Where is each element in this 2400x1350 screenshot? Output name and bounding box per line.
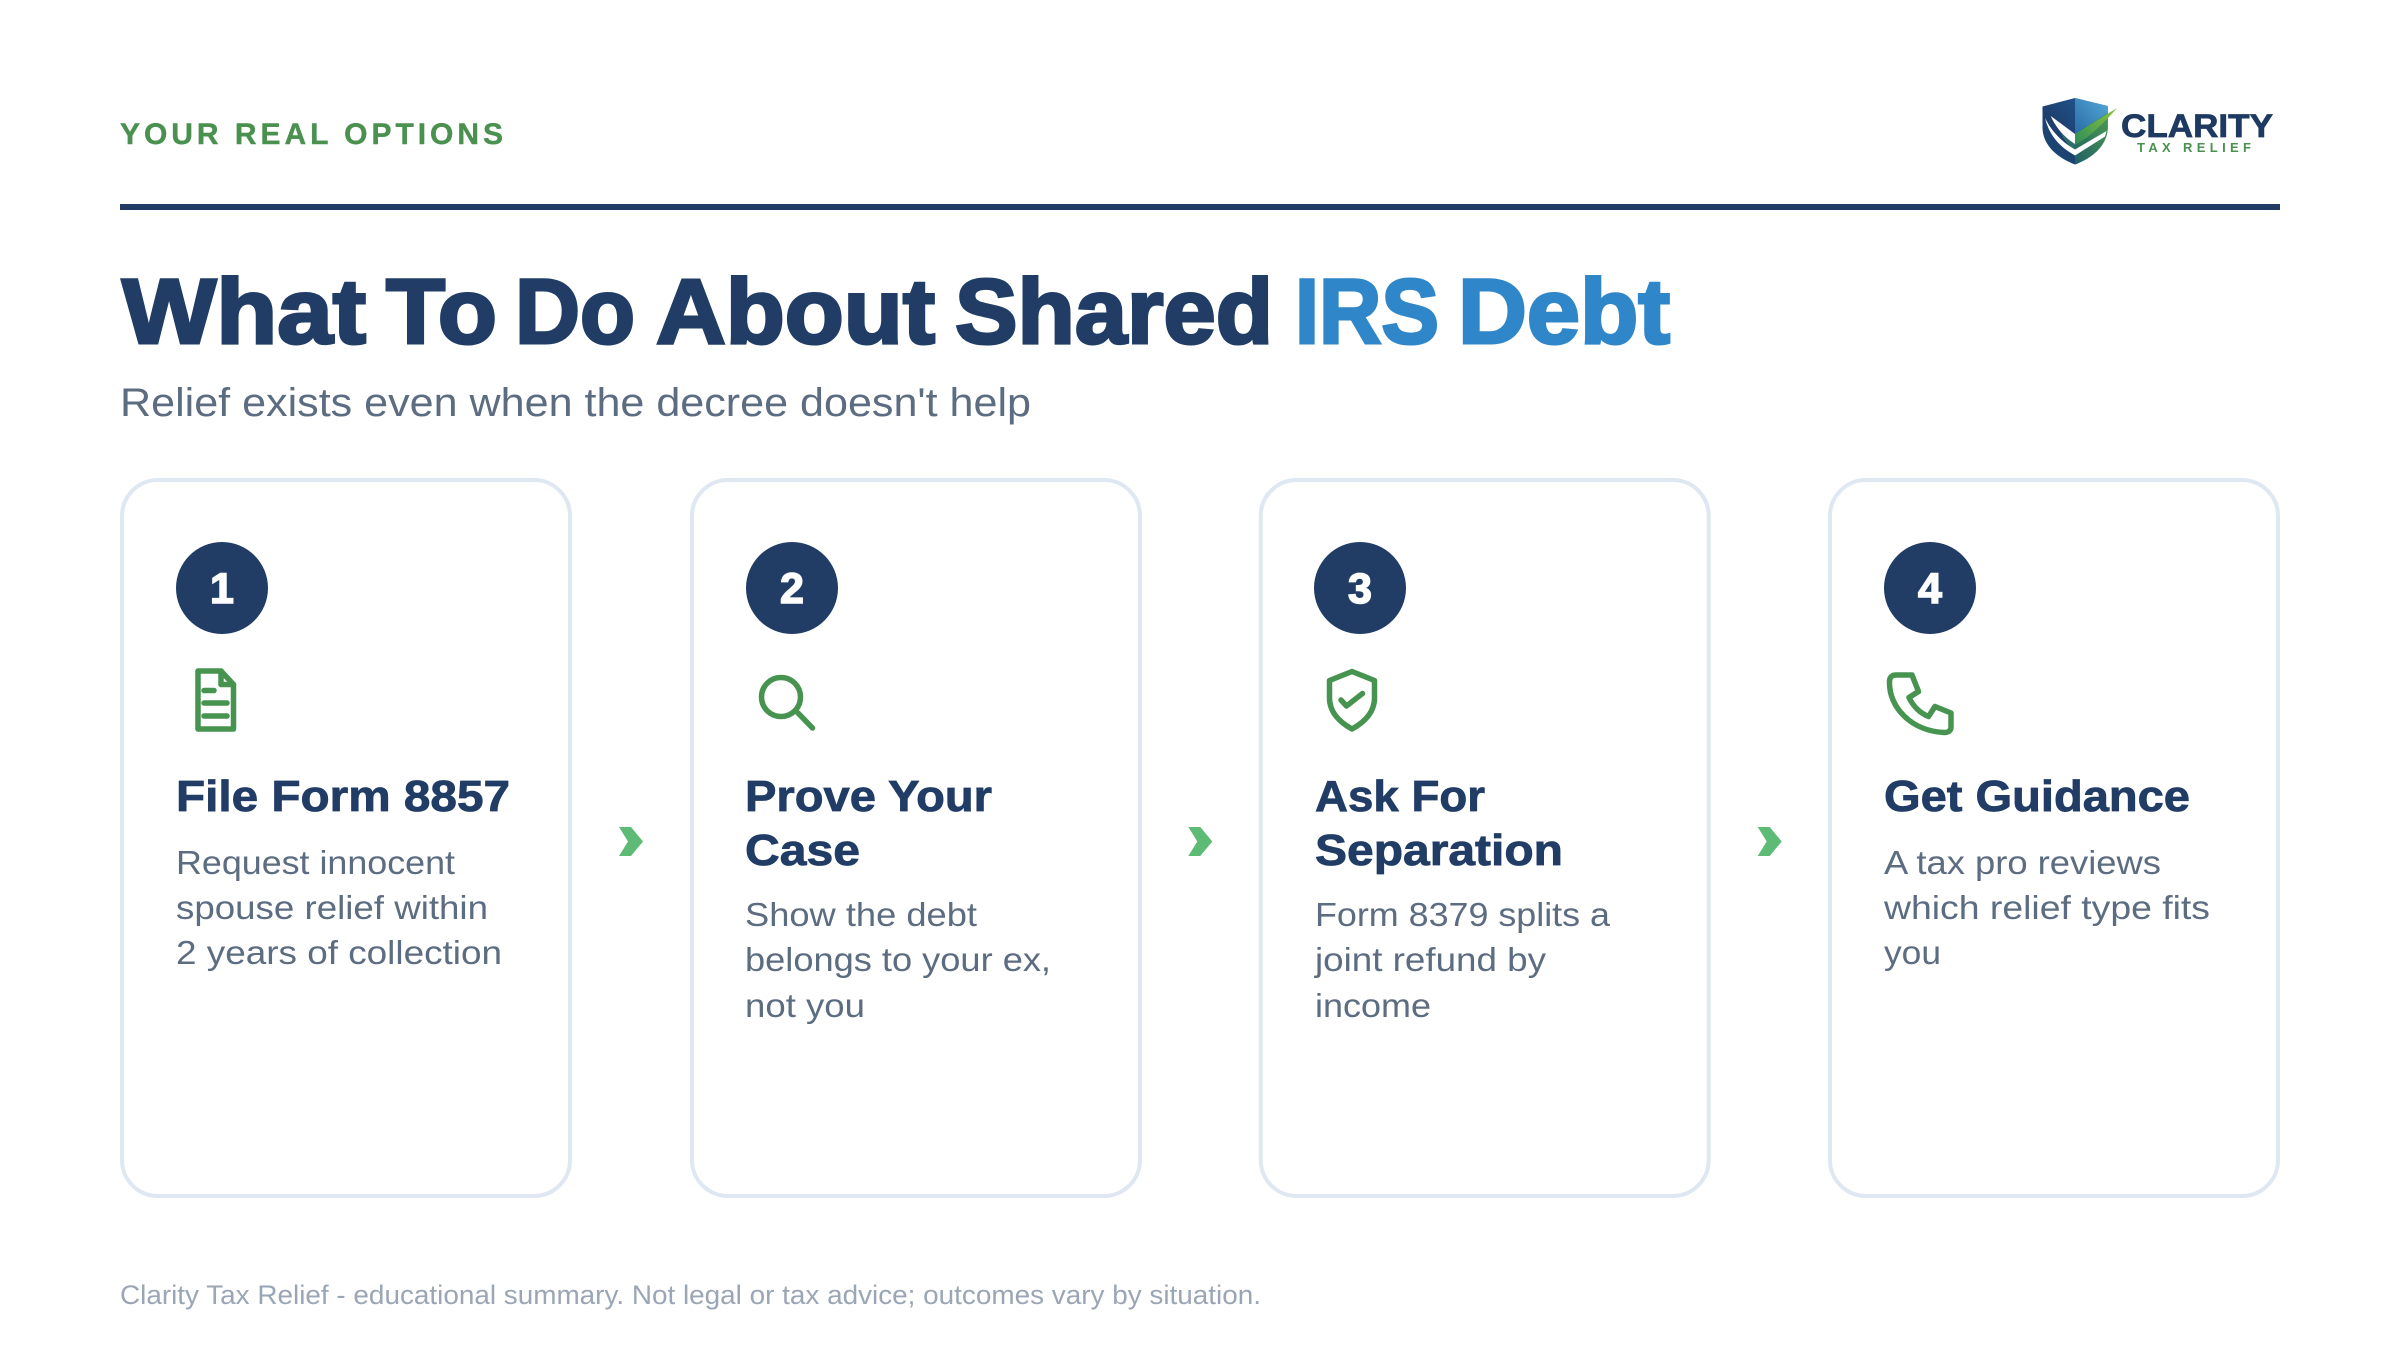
heading: Ask For [1315, 772, 1485, 821]
body text: 2 years of collection [176, 934, 502, 971]
heading: File Form 8857 [176, 772, 510, 821]
title: What [122, 261, 366, 363]
logo wordmark: CLARITY [2121, 108, 2273, 144]
body text: belongs to your ex, [745, 941, 1051, 978]
body text: Request innocent [176, 844, 455, 881]
panel: step 3 ask for separation [1261, 480, 1709, 1196]
body text: Form 8379 splits a [1315, 896, 1611, 933]
heading: Get Guidance [1884, 772, 2190, 821]
body text: joint refund by [1314, 941, 1547, 978]
heading: Prove Your [745, 772, 992, 821]
icon: shield check [1330, 672, 1374, 729]
number badge 1 [176, 542, 268, 634]
heading: Case [745, 826, 860, 875]
title: About [656, 261, 935, 363]
heading: Separation [1315, 826, 1563, 875]
body text [1314, 896, 1611, 1024]
arrow 1 [619, 827, 643, 856]
number badge 4 [1884, 542, 1976, 634]
logo: Clarity Tax Relief [2042, 98, 2273, 164]
header rule [120, 204, 2280, 210]
panel: step 2 prove your case [692, 480, 1140, 1196]
number badge 3 [1314, 542, 1406, 634]
footer disclaimer: Clarity Tax Relief - educational summary. Not legal or tax advice; outcomes vary by situation. [120, 1280, 1261, 1310]
number badge 1: 1 [210, 565, 234, 613]
body text: income [1315, 987, 1431, 1024]
title: To [386, 261, 497, 363]
number badge 2 [746, 542, 838, 634]
title: IRS [1295, 261, 1439, 363]
body text: Show the debt [745, 896, 977, 933]
body text [176, 844, 502, 971]
icon: document [198, 671, 234, 729]
number badge 3: 3 [1348, 565, 1372, 613]
logo tagline: TAX RELIEF [2137, 140, 2251, 155]
body text [745, 896, 1051, 1024]
panel: step 4 get guidance [1830, 480, 2278, 1196]
icon: phone [1889, 675, 1951, 732]
body text: not you [745, 987, 865, 1024]
icon: logo shield [2042, 98, 2117, 164]
number badge 2: 2 [780, 565, 804, 613]
body text: A tax pro reviews [1884, 844, 2161, 881]
icon: magnifier [762, 678, 812, 728]
body text: which relief type fits [1883, 889, 2210, 926]
body text: spouse relief within [176, 889, 488, 926]
body text: you [1884, 934, 1941, 971]
title: Do [515, 261, 635, 363]
title: Shared [955, 261, 1273, 363]
title: Debt [1458, 261, 1670, 363]
body text [1883, 844, 2210, 971]
arrow 2 [1188, 827, 1212, 856]
eyebrow: your real options: YOUR REAL OPTIONS [120, 118, 503, 151]
subtitle: Relief exists even when the decree doesn't help [120, 381, 1031, 425]
heading [745, 772, 992, 875]
arrow 3 [1758, 827, 1782, 856]
panel: step 1 file form 8857 [122, 480, 570, 1196]
number badge 4: 4 [1918, 565, 1942, 613]
heading [1315, 772, 1563, 875]
